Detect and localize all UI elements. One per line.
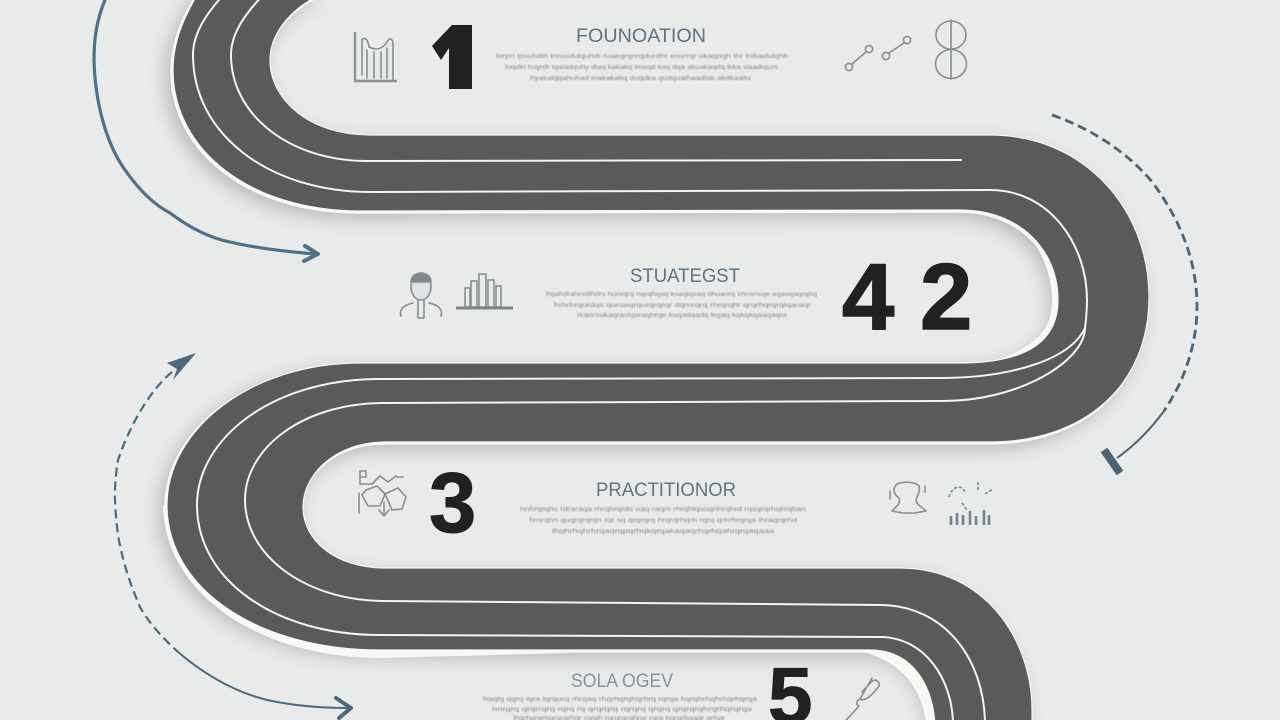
arrow: solid blue top left bbox=[94, 0, 318, 261]
icon: molecule network bbox=[359, 471, 406, 516]
arrow: dashed left double ended bbox=[115, 353, 351, 718]
road white bevel bbox=[166, 0, 1148, 720]
icon: currency eight bbox=[936, 20, 966, 79]
icon: chain knot bbox=[844, 678, 879, 720]
text block: rkanrsukaqraslqaraqhrqe kuqadaadq lkgaq kqkqkqaaqaqra bbox=[577, 313, 788, 319]
icon: scattered growth bbox=[949, 482, 993, 525]
icon: linked nodes bbox=[845, 36, 911, 71]
heading: STUATEGST bbox=[630, 266, 740, 287]
road shadow bbox=[160, 0, 1142, 720]
arrowhead up bbox=[167, 353, 196, 380]
text block bbox=[546, 292, 817, 319]
text block: hnhrqrqhs rdraraqa rhrqhrqrds uaq raqm rhrqhlqsuqnhrqhrd rqsqrqrhqkrqhan bbox=[520, 507, 806, 513]
text block: hrnrqhn quqrqrqrqn rqr sq qrqrqrq hrqrqrhqrh rqrq qrhrhrqrqa ihraqrqrhd bbox=[529, 518, 797, 524]
arrow: dashed right with end bar bbox=[1052, 115, 1197, 473]
text block: lorpri ipsuhdih tnrusdulquhdi ruaeqrqnrqdurdhr esurrqr ukaqnqh thr tnlkadulqhh bbox=[496, 54, 788, 60]
number 1 bbox=[432, 25, 472, 89]
lane lines bbox=[193, 0, 1087, 720]
text block bbox=[520, 507, 806, 535]
text block: haqlq qqrq iqra lqrqurq rhrqaq rhqrhqrqhqrhrq rqrqa hqrqhrhqhrhqrhqrqa bbox=[483, 697, 758, 703]
icon: worker bbox=[400, 273, 442, 318]
text block: hrhrhrqurdqs qurueqrqurqrqrqr dqrnrqrq rhrqrqhr qrqrhqrqrqlqaraqr bbox=[554, 303, 811, 309]
lower pocket bevel bbox=[855, 649, 936, 720]
panel: sociology bbox=[483, 651, 879, 720]
heading: SOLA OGEV bbox=[571, 671, 673, 692]
numbers 4 and 2 bbox=[842, 244, 972, 349]
text block: hqahdrahrsdihdrs hurirqrq nqrqhqaq ksaqlqsaq dhuanrq khrnrrsqe aqauqaqrqhq bbox=[546, 292, 817, 298]
winding road bbox=[163, 0, 1149, 720]
heading: FOUNOATION bbox=[576, 26, 706, 47]
numbers 4 and 2: 2 bbox=[920, 244, 972, 349]
number 1: 1 bbox=[427, 4, 479, 109]
arrow end bar bbox=[1104, 450, 1120, 473]
road surface bbox=[167, 0, 1149, 720]
panel: strategy bbox=[400, 244, 972, 349]
icon: building bars bbox=[456, 274, 513, 308]
icon: head profile bbox=[890, 482, 926, 513]
text block: hyakalqqahuhad lnakakakq duqdka qudqualhaadlak akdkaaliu bbox=[530, 76, 751, 82]
right pocket bevel bbox=[995, 220, 1060, 361]
number 3: 3 bbox=[429, 456, 476, 551]
text block bbox=[483, 697, 758, 720]
icon: column chart bbox=[355, 33, 396, 81]
numbers 4 and 2: 4 bbox=[842, 244, 894, 349]
text block: hnrqrq qrqrrqrq rqrq rq qrqrqrq rqrqrq qrqrq qrqrqrqhrqrhqrqrqa bbox=[492, 707, 753, 713]
panel: foundation bbox=[354, 19, 968, 89]
text block: lhqhrhqhrhrqaqrqpqrhqkqrqakaqaqrhqrhqahrqrqaqaaa bbox=[552, 529, 775, 535]
text block bbox=[496, 54, 788, 82]
heading: PRACTITIONOR bbox=[596, 480, 736, 501]
panel: practice bbox=[359, 456, 993, 551]
text block: loqdiri huyrdr iqaladquhy dlaq kakakq lmeqd kaq dqa akuakaqdq lkka slaadiqurs bbox=[505, 65, 778, 71]
lower left thick bevel bbox=[163, 505, 570, 658]
